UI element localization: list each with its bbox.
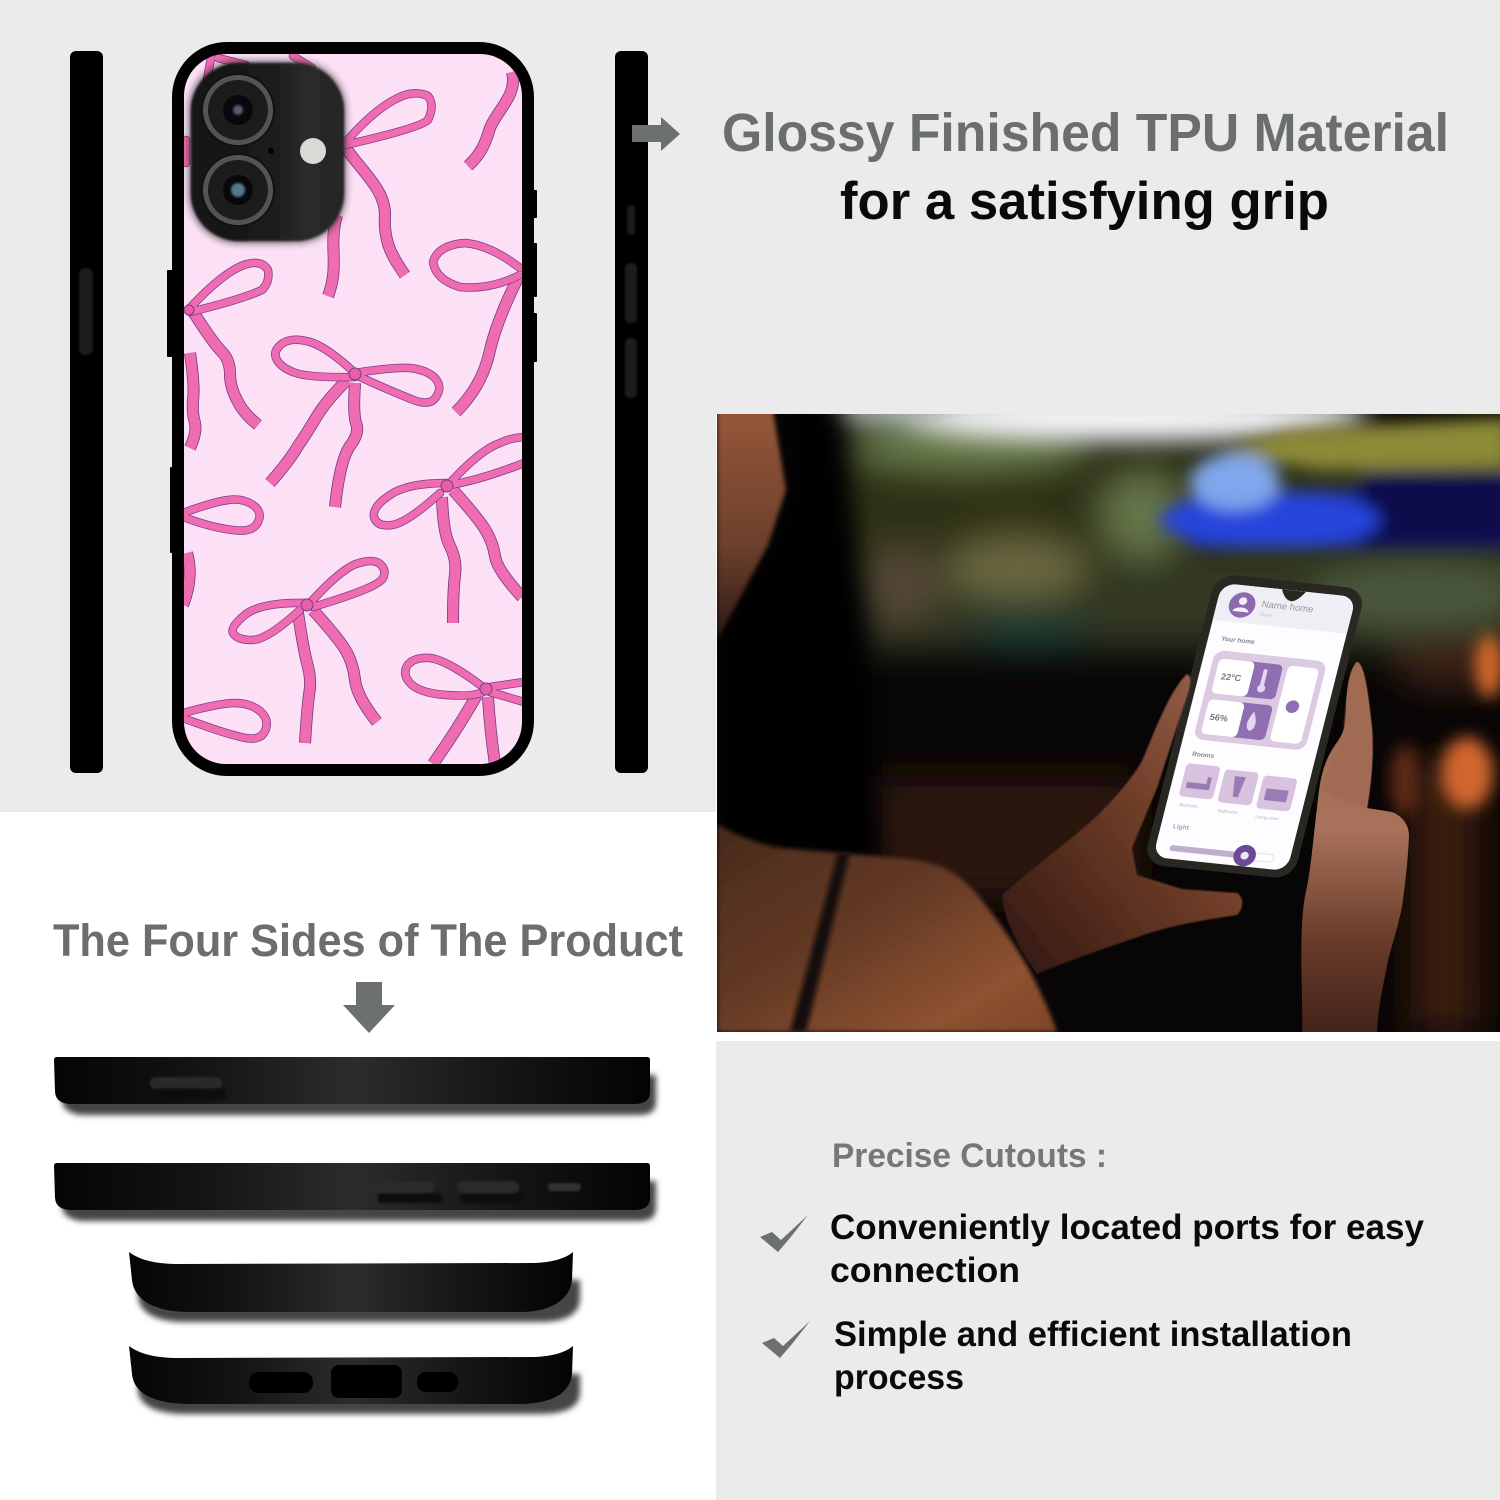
light slider bbox=[1170, 844, 1274, 866]
bullet text 1: Conveniently located ports for easy bbox=[830, 1208, 1425, 1247]
upper lens bbox=[201, 73, 275, 147]
pink bow pattern bbox=[183, 54, 524, 764]
app header bbox=[1228, 592, 1314, 618]
case frame bbox=[172, 42, 534, 776]
home tiles panel: 56% bbox=[1209, 712, 1229, 724]
right side view of case bbox=[615, 51, 648, 773]
heading: precise cutouts: Precise Cutouts : bbox=[832, 1137, 1107, 1175]
app header: Name home bbox=[1260, 599, 1315, 615]
bullet text 1: connection bbox=[830, 1251, 1020, 1290]
room tiles: Living room bbox=[1255, 814, 1280, 821]
rooms label: Rooms bbox=[1191, 751, 1215, 760]
smartphone in hand bbox=[1143, 573, 1366, 880]
home tiles panel: 22°C bbox=[1220, 671, 1243, 683]
bullet text 2 bbox=[834, 1315, 1352, 1397]
lower lens bbox=[201, 153, 275, 227]
camera module bbox=[190, 62, 345, 242]
phone case back view bbox=[167, 42, 537, 776]
side view 1 bbox=[54, 1057, 656, 1115]
right thumb over phone bbox=[1343, 661, 1374, 808]
left hand bbox=[1002, 674, 1242, 974]
lifestyle photo bbox=[717, 394, 1500, 1032]
icon: check mark 2 bbox=[762, 1321, 810, 1358]
room tiles: Bathroom bbox=[1217, 808, 1238, 815]
microphone hole bbox=[268, 148, 274, 154]
woman neck skin bbox=[717, 405, 786, 640]
bullet text 2: process bbox=[834, 1358, 964, 1397]
room tiles: Bedroom bbox=[1179, 802, 1199, 809]
left side view of case bbox=[70, 51, 103, 773]
phone screen bbox=[1153, 583, 1356, 871]
icon: check mark 1 bbox=[760, 1215, 808, 1252]
side view 2 bbox=[54, 1163, 656, 1221]
blurred landscape background bbox=[840, 414, 1500, 1032]
side view 4 with port cutouts bbox=[129, 1346, 580, 1414]
heading: material: Glossy Finished TPU Material bbox=[722, 103, 1449, 163]
woman shoulder bbox=[717, 824, 1057, 1032]
home tiles panel bbox=[1193, 650, 1327, 751]
right hand bbox=[1301, 662, 1409, 1032]
room tiles bbox=[1175, 763, 1299, 822]
bullet text 1 bbox=[830, 1208, 1425, 1290]
bullet text 2: Simple and efficient installation bbox=[834, 1315, 1352, 1354]
dress strap bbox=[790, 852, 850, 1032]
heading: four sides: The Four Sides of The Product bbox=[53, 915, 683, 966]
arrow pointing to heading bbox=[632, 117, 680, 151]
your home label: Your home bbox=[1220, 636, 1256, 646]
heading: material bbox=[722, 103, 1449, 231]
arrow pointing down bbox=[343, 982, 395, 1033]
side view 3 bbox=[129, 1252, 580, 1322]
app header: Home bbox=[1258, 612, 1273, 619]
heading: material: for a satisfying grip bbox=[840, 172, 1329, 231]
flash bbox=[300, 138, 326, 164]
woman hair silhouette bbox=[809, 414, 887, 856]
case side buttons bbox=[167, 190, 537, 553]
light label: Light bbox=[1172, 823, 1190, 832]
